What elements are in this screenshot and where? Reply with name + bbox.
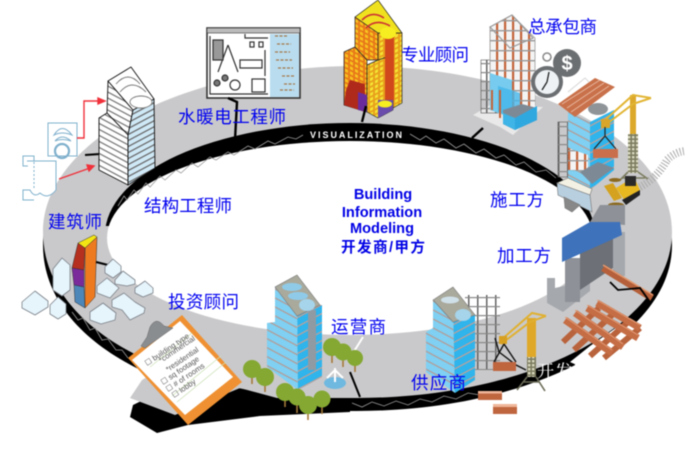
building: site trailer <box>557 178 592 212</box>
building: contractor tower under construction <box>473 15 543 135</box>
role labels: 投资顾问 <box>168 292 239 312</box>
decorative tracks: tire marks <box>640 151 685 187</box>
band label: VISUALIZATION: VISUALIZATION <box>310 130 402 140</box>
inner black band <box>105 122 593 227</box>
center title: Information <box>342 205 422 221</box>
role labels: 专业顾问 <box>401 45 469 65</box>
role labels: 水暖电工程师 <box>178 107 286 127</box>
checklist text: ☐ sq footage <box>159 354 201 387</box>
role labels: 施工方 <box>490 190 544 210</box>
icon: second tower crane <box>494 313 546 391</box>
white label on band: 开发商 <box>537 362 591 381</box>
checklist text: *commercial <box>157 334 197 365</box>
connector: contractor tower to band <box>472 128 483 138</box>
panel: clipboard checklist <box>128 315 242 425</box>
checklist text: ☐ lobby <box>170 377 198 400</box>
connector: architect to tower <box>85 154 100 155</box>
center title: Modeling <box>350 221 414 237</box>
wavy line on band <box>72 134 556 407</box>
connectors: operator site <box>350 337 363 397</box>
checklist text: *residential <box>164 345 201 374</box>
connector: floor plan to band <box>228 98 237 140</box>
inner white hole <box>107 141 593 335</box>
checklist text: ☐ # of rooms <box>164 361 206 394</box>
checklist text: ☐ building type <box>143 331 191 368</box>
connector: massing model to band <box>96 262 108 265</box>
ring underside black edge <box>43 79 672 433</box>
icon: stopwatch <box>531 53 563 98</box>
role labels <box>48 17 597 393</box>
checklist text <box>143 331 206 400</box>
icon: tower crane <box>593 95 651 181</box>
building: supplier tower with scaffold <box>426 287 500 393</box>
grey ring surface <box>43 66 672 415</box>
icon: fountain <box>324 368 346 389</box>
connector: energy tower to band <box>362 106 366 122</box>
building: main construction tower with planks <box>558 78 615 190</box>
icon: dollar coin: $ <box>561 53 573 75</box>
building: orange massing model <box>72 235 97 308</box>
icon: steel fabrication press <box>547 205 653 312</box>
building: operator tower <box>267 275 322 390</box>
icon: trees <box>243 338 363 420</box>
building: energy analysis tower <box>344 0 402 118</box>
center title: Building <box>354 187 412 203</box>
building: wireframe structural tower <box>99 67 155 185</box>
role labels: 运营商 <box>331 317 386 337</box>
icon: brick stacks <box>478 362 517 414</box>
icon: floor plan screen <box>207 28 300 98</box>
center title: 开发商/甲方 <box>341 238 425 256</box>
icon: bulldozer <box>604 176 640 208</box>
role labels: 供应商 <box>411 373 466 393</box>
icon: white massing blocks <box>22 258 153 324</box>
icon: dollar coin <box>553 49 581 77</box>
role labels: 建筑师 <box>48 212 102 232</box>
clipboard metal clip <box>141 321 173 348</box>
role labels: 总承包商 <box>528 17 597 37</box>
role labels: 加工方 <box>497 246 551 266</box>
icon: architect sketches <box>23 123 77 200</box>
role labels: 结构工程师 <box>144 196 232 216</box>
icon: steel beam stack <box>563 300 640 358</box>
red arrows <box>59 98 105 179</box>
center title <box>341 187 425 256</box>
connector: press to band <box>610 282 650 302</box>
